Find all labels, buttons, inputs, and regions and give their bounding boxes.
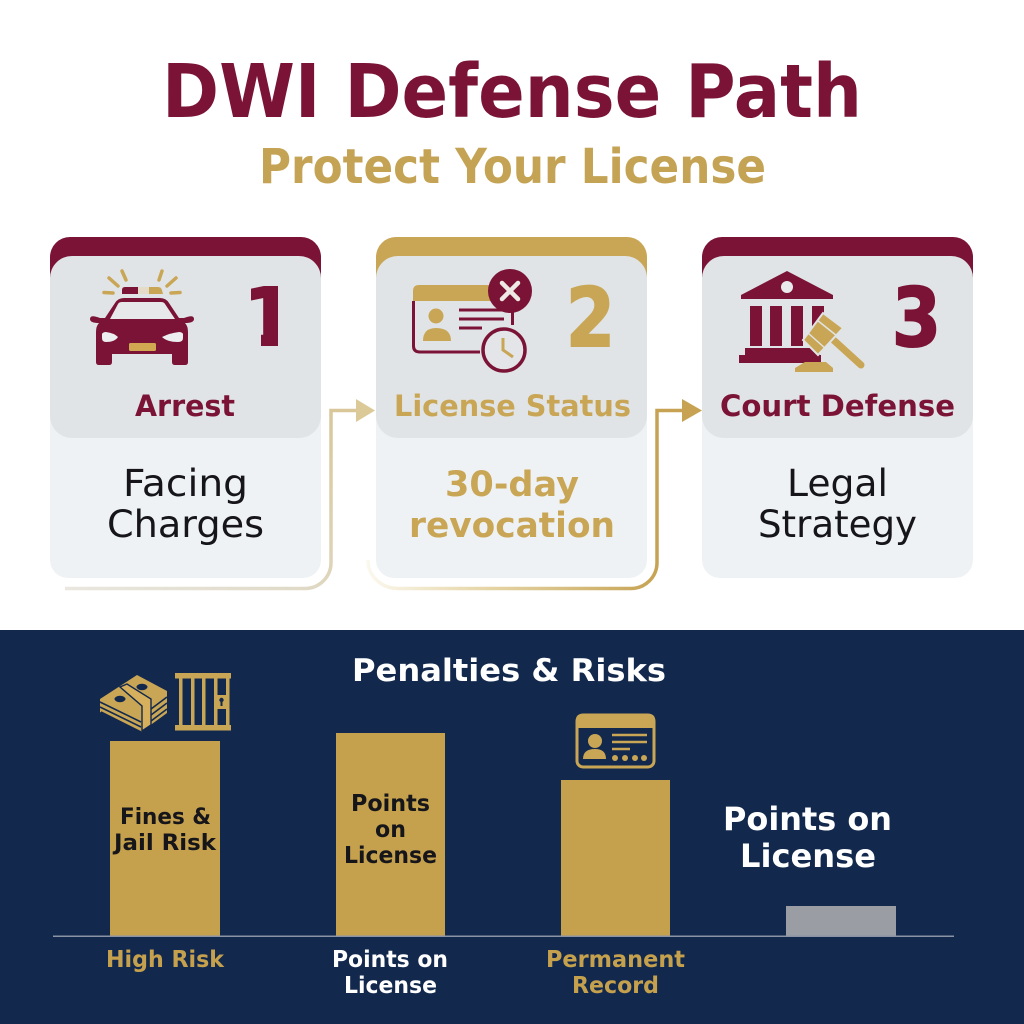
bar: high risk: Fines & [120, 805, 211, 830]
step description: 30-day revocation: revocation [409, 506, 615, 546]
bar: high risk [110, 741, 220, 936]
step description: legal strategy: Legal [787, 462, 888, 505]
panel: step 1 arrest [50, 237, 321, 578]
icon: id card [576, 714, 655, 767]
bar: points on license: Points [351, 791, 430, 817]
icon: jail cell [175, 673, 231, 730]
step number 3: 3 [892, 272, 941, 366]
arrow: arrest to license status [65, 399, 375, 588]
axis label: permanent record: Record [572, 973, 659, 999]
icon: police car [90, 271, 194, 365]
title: DWI Defense Path [162, 49, 862, 135]
icon: license with x and clock [413, 269, 532, 371]
step label: arrest: Arrest [135, 389, 235, 423]
step description: facing charges: Facing [123, 462, 248, 505]
step label: license status: License Status [394, 389, 631, 423]
callout: points on license: License [740, 837, 876, 875]
callout: points on license: Points on [723, 800, 892, 838]
bar: points on license: on [375, 817, 406, 843]
bar chart [53, 733, 954, 999]
heading: penalties and risks: Penalties & Risks [352, 653, 666, 689]
axis label: points on license: Points on [332, 947, 448, 973]
step number 2: 2 [566, 272, 615, 366]
step description: legal strategy [758, 462, 917, 546]
bar: points on license: License [344, 843, 437, 869]
axis label: points on license [332, 947, 448, 999]
callout: points on license [723, 800, 892, 875]
step description: facing charges [107, 462, 264, 546]
axis baseline [53, 936, 954, 937]
icon: stack of cash [100, 675, 167, 732]
subtitle: Protect Your License [259, 139, 766, 195]
panel: penalties and risks [0, 630, 1024, 1024]
step description: facing charges: Charges [107, 503, 264, 546]
icon: courthouse and gavel [739, 271, 861, 372]
bar: high risk: Jail Risk [112, 831, 217, 856]
bar: points on license [336, 733, 445, 936]
panel: step 2 license status [376, 237, 647, 578]
axis label: permanent record: Permanent [546, 947, 685, 973]
axis label: high risk: High Risk [106, 947, 225, 973]
bar: permanent record [561, 780, 670, 936]
step description: 30-day revocation: 30-day [445, 465, 579, 505]
step label: court defense: Court Defense [720, 389, 955, 423]
arrow: license status to court defense [368, 399, 702, 588]
axis label: permanent record [546, 947, 685, 999]
bar: points on license small [786, 906, 896, 936]
panel: step 3 court defense [702, 237, 973, 578]
axis label: points on license: License [344, 973, 437, 999]
step description: 30-day revocation [409, 465, 615, 546]
step number 1: 1 [241, 272, 297, 366]
step description: legal strategy: Strategy [758, 503, 917, 546]
